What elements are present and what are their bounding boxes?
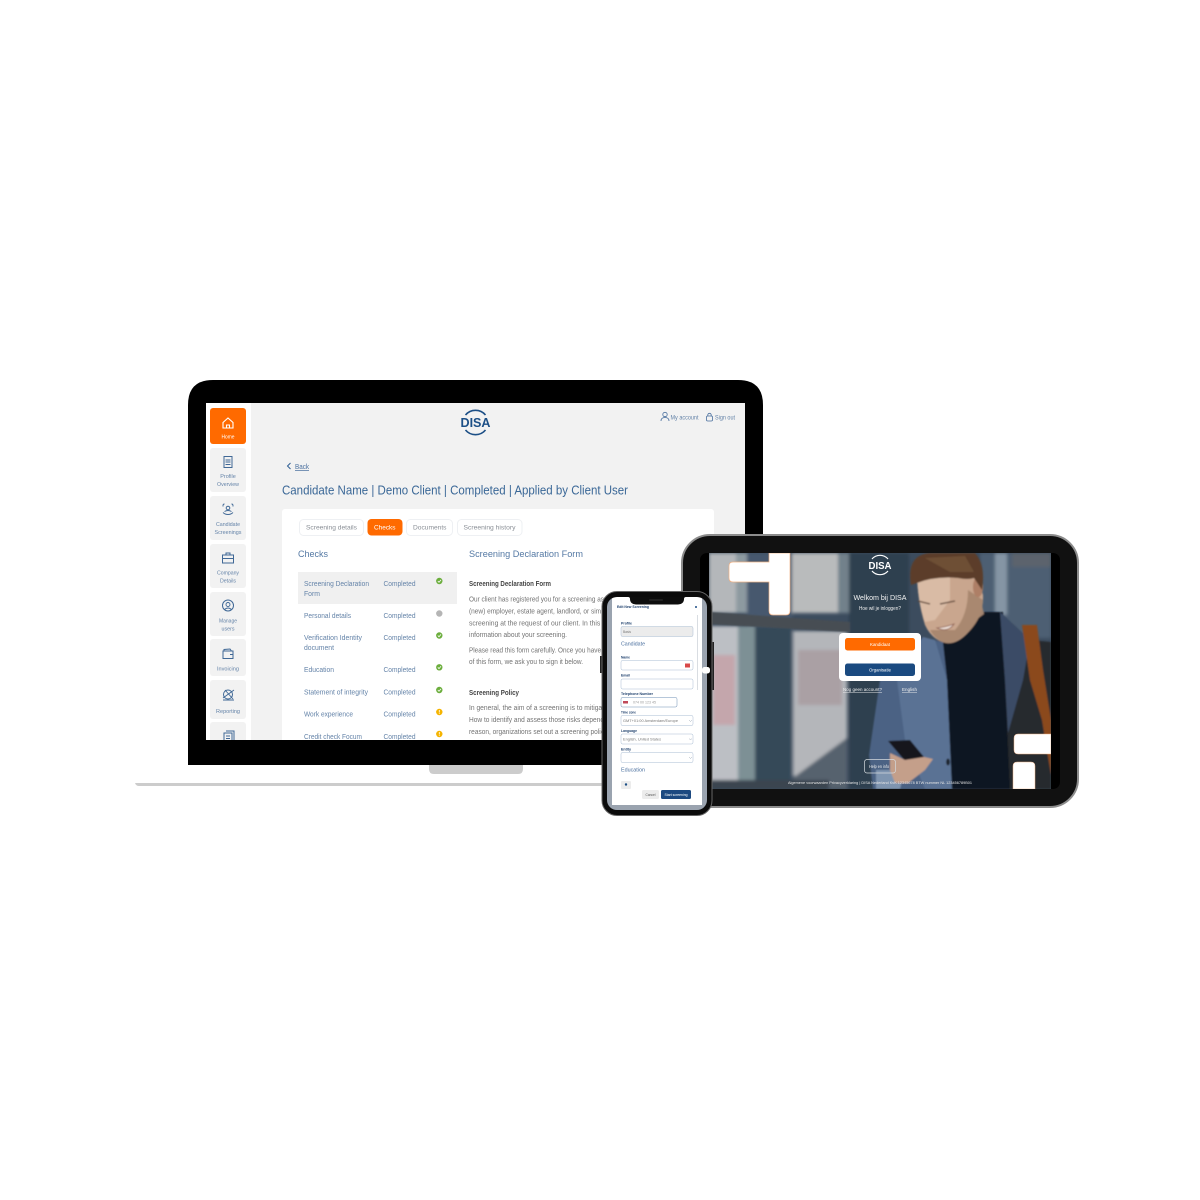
login card: Organisatie — [869, 668, 892, 672]
form heading: Screening Declaration Form — [469, 549, 583, 559]
laptop — [135, 380, 763, 786]
phone — [600, 592, 714, 816]
checks table: Completed — [384, 613, 416, 620]
tabs: Screening history — [464, 524, 516, 532]
phone speaker — [649, 600, 663, 601]
form fields: Entity — [621, 748, 631, 752]
back link — [288, 462, 309, 471]
nav: manage users: Manage — [219, 618, 237, 624]
checks table: Verification Identity — [304, 635, 362, 642]
tablet welcome heading: Welkom bij DISA — [854, 593, 907, 602]
form fields: Profile — [621, 622, 632, 626]
form fields: Candidate — [621, 642, 645, 648]
tabs: Screening details — [306, 524, 358, 532]
checks heading: Checks — [298, 549, 328, 559]
form fields: Education — [621, 768, 645, 774]
form body text: (new) employer, estate agent, landlord, or simil — [469, 608, 604, 616]
phone screen — [607, 597, 707, 810]
add button — [621, 781, 631, 789]
tabs: Checks — [374, 524, 396, 532]
smile — [937, 624, 954, 630]
checks table: Screening Declaration — [304, 581, 369, 588]
eyes — [918, 601, 955, 604]
form fields: Language — [621, 729, 637, 733]
checks table: Completed — [384, 690, 416, 696]
tablet logo: DISA — [868, 555, 892, 575]
phone in hand — [888, 740, 924, 761]
login card: Kandidaat — [870, 642, 891, 647]
account links: Sign out — [715, 416, 735, 422]
tabs — [300, 519, 522, 536]
form body text: How to identify and assess those risks depend — [469, 717, 604, 724]
white tab — [702, 667, 710, 674]
checks table — [298, 572, 457, 741]
hand — [890, 753, 933, 783]
phone body — [602, 592, 712, 816]
tablet footer links: Algemene voorwaarden Privacyverklaring | DISA Nederland KvK 12345678 BTW nummer NL 123456789B01 — [788, 781, 972, 785]
nav: company details: Company — [217, 570, 239, 576]
face — [917, 576, 984, 645]
back link: Back — [295, 462, 309, 471]
form fields: 074 00 123 45 — [633, 700, 656, 704]
form body text: screening at the request of our client. In this f — [469, 620, 604, 628]
beard shadow — [930, 590, 983, 643]
jacket cuff — [876, 770, 905, 789]
nav: company details: Details — [220, 578, 236, 584]
checks table: Education — [304, 667, 334, 674]
cancel button: Cancel — [646, 793, 656, 797]
right shoulder — [1006, 640, 1051, 789]
page title: Candidate Name | Demo Client | Completed | Applied by Client User — [282, 482, 629, 498]
nav: documents — [210, 722, 246, 740]
tablet UI: white blocks — [729, 553, 1051, 789]
main card — [282, 509, 714, 749]
form fields: Basis — [623, 630, 631, 634]
form body text: reason, organizations set out a screening polic — [469, 729, 604, 736]
nav: profile overview — [210, 448, 246, 492]
account and language links: English — [902, 687, 917, 692]
form body text: Please read this form carefully. Once you have — [469, 648, 601, 654]
right lapel — [1000, 612, 1030, 733]
blazer body — [869, 637, 952, 789]
form fields: Name — [621, 656, 630, 660]
nav: candidate screenings: Candidate — [216, 522, 240, 528]
form fields — [621, 622, 693, 774]
cancel button — [642, 790, 659, 799]
logo: DISA: DISA — [460, 415, 491, 430]
help button: Help en info — [869, 764, 889, 769]
scrollbar — [697, 615, 698, 690]
account links — [661, 412, 735, 422]
nav: reporting: Reporting — [216, 709, 240, 715]
jacket button — [946, 758, 950, 766]
photo: horizontal beam — [709, 612, 850, 632]
tablet screen photo — [709, 553, 1051, 789]
form body text: Screening Policy — [469, 690, 519, 697]
nav: home — [210, 408, 246, 444]
photo: man — [869, 553, 1051, 789]
form fields: English, United States — [623, 738, 661, 742]
logo: DISA — [460, 410, 491, 435]
checks table: Completed — [384, 581, 416, 588]
laptop hinge notch — [429, 765, 523, 774]
start screening button: Start screening — [664, 793, 688, 797]
form body text: Screening Declaration Form — [469, 581, 551, 588]
tablet subheading: Hoe wil je inloggen? — [859, 606, 901, 612]
nav: candidate screenings — [210, 496, 246, 540]
laptop screen — [206, 403, 745, 752]
form body text: information about your screening. — [469, 632, 567, 639]
form fields: Email — [621, 674, 630, 678]
laptop bezel — [188, 380, 763, 765]
ear — [973, 577, 983, 597]
neck — [978, 606, 986, 620]
nav: reporting — [210, 680, 246, 719]
nav: profile overview: Overview — [217, 482, 240, 488]
close icon — [695, 606, 697, 608]
checks table: Completed — [384, 667, 416, 674]
checks table: Completed — [384, 734, 416, 741]
nav: profile overview: Profile — [220, 474, 236, 480]
checks table: Form — [304, 591, 320, 598]
nav: manage users — [210, 592, 246, 636]
form fields: Time zone — [621, 710, 636, 714]
checks table: Completed — [384, 635, 416, 642]
photo: blurred window background — [709, 553, 1051, 789]
status icons — [436, 578, 442, 737]
phone notch — [628, 597, 686, 604]
hair — [910, 553, 983, 590]
help button — [864, 760, 896, 773]
checks table: Work experience — [304, 712, 353, 718]
tablet body — [682, 535, 1078, 807]
checks table: Credit check Focum — [304, 734, 362, 741]
form body text — [469, 581, 604, 736]
form body text: of this form, we ask you to sign it below. — [469, 659, 583, 666]
account and language links — [843, 687, 917, 692]
tabs: Documents — [413, 524, 447, 532]
form body text: In general, the aim of a screening is to mitigat — [469, 705, 604, 712]
bag strap — [1022, 625, 1051, 775]
checks table: Completed — [384, 712, 416, 718]
form body text: Our client has registered you for a screening as — [469, 596, 604, 604]
nav: manage users: users — [222, 626, 235, 632]
tablet — [682, 535, 1078, 807]
checks table: document — [304, 645, 334, 652]
laptop base line — [135, 783, 610, 786]
sweater — [943, 612, 1010, 789]
nav: candidate screenings: Screenings — [214, 530, 242, 536]
nav: home: Home — [222, 434, 234, 440]
nav: company details — [210, 544, 246, 588]
modal title: Edit New Screening — [617, 605, 649, 609]
sidebar — [206, 403, 251, 752]
start screening button — [661, 790, 691, 799]
tablet logo: DISA: DISA — [868, 561, 892, 572]
account and language links: Nog geen account? — [843, 687, 882, 692]
phone side buttons — [600, 642, 714, 690]
checks table: Statement of integrity — [304, 690, 368, 696]
nav: invoicing — [210, 639, 246, 676]
form fields: GMT+01:00 Amsterdam/Europe — [623, 719, 678, 723]
account links: My account — [670, 416, 699, 422]
nav: invoicing: Invoicing — [217, 666, 239, 672]
login card — [839, 633, 921, 681]
form fields: Telephone Number — [621, 692, 654, 696]
tablet inner bezel — [700, 553, 1060, 789]
checks table: Personal details — [304, 613, 351, 620]
